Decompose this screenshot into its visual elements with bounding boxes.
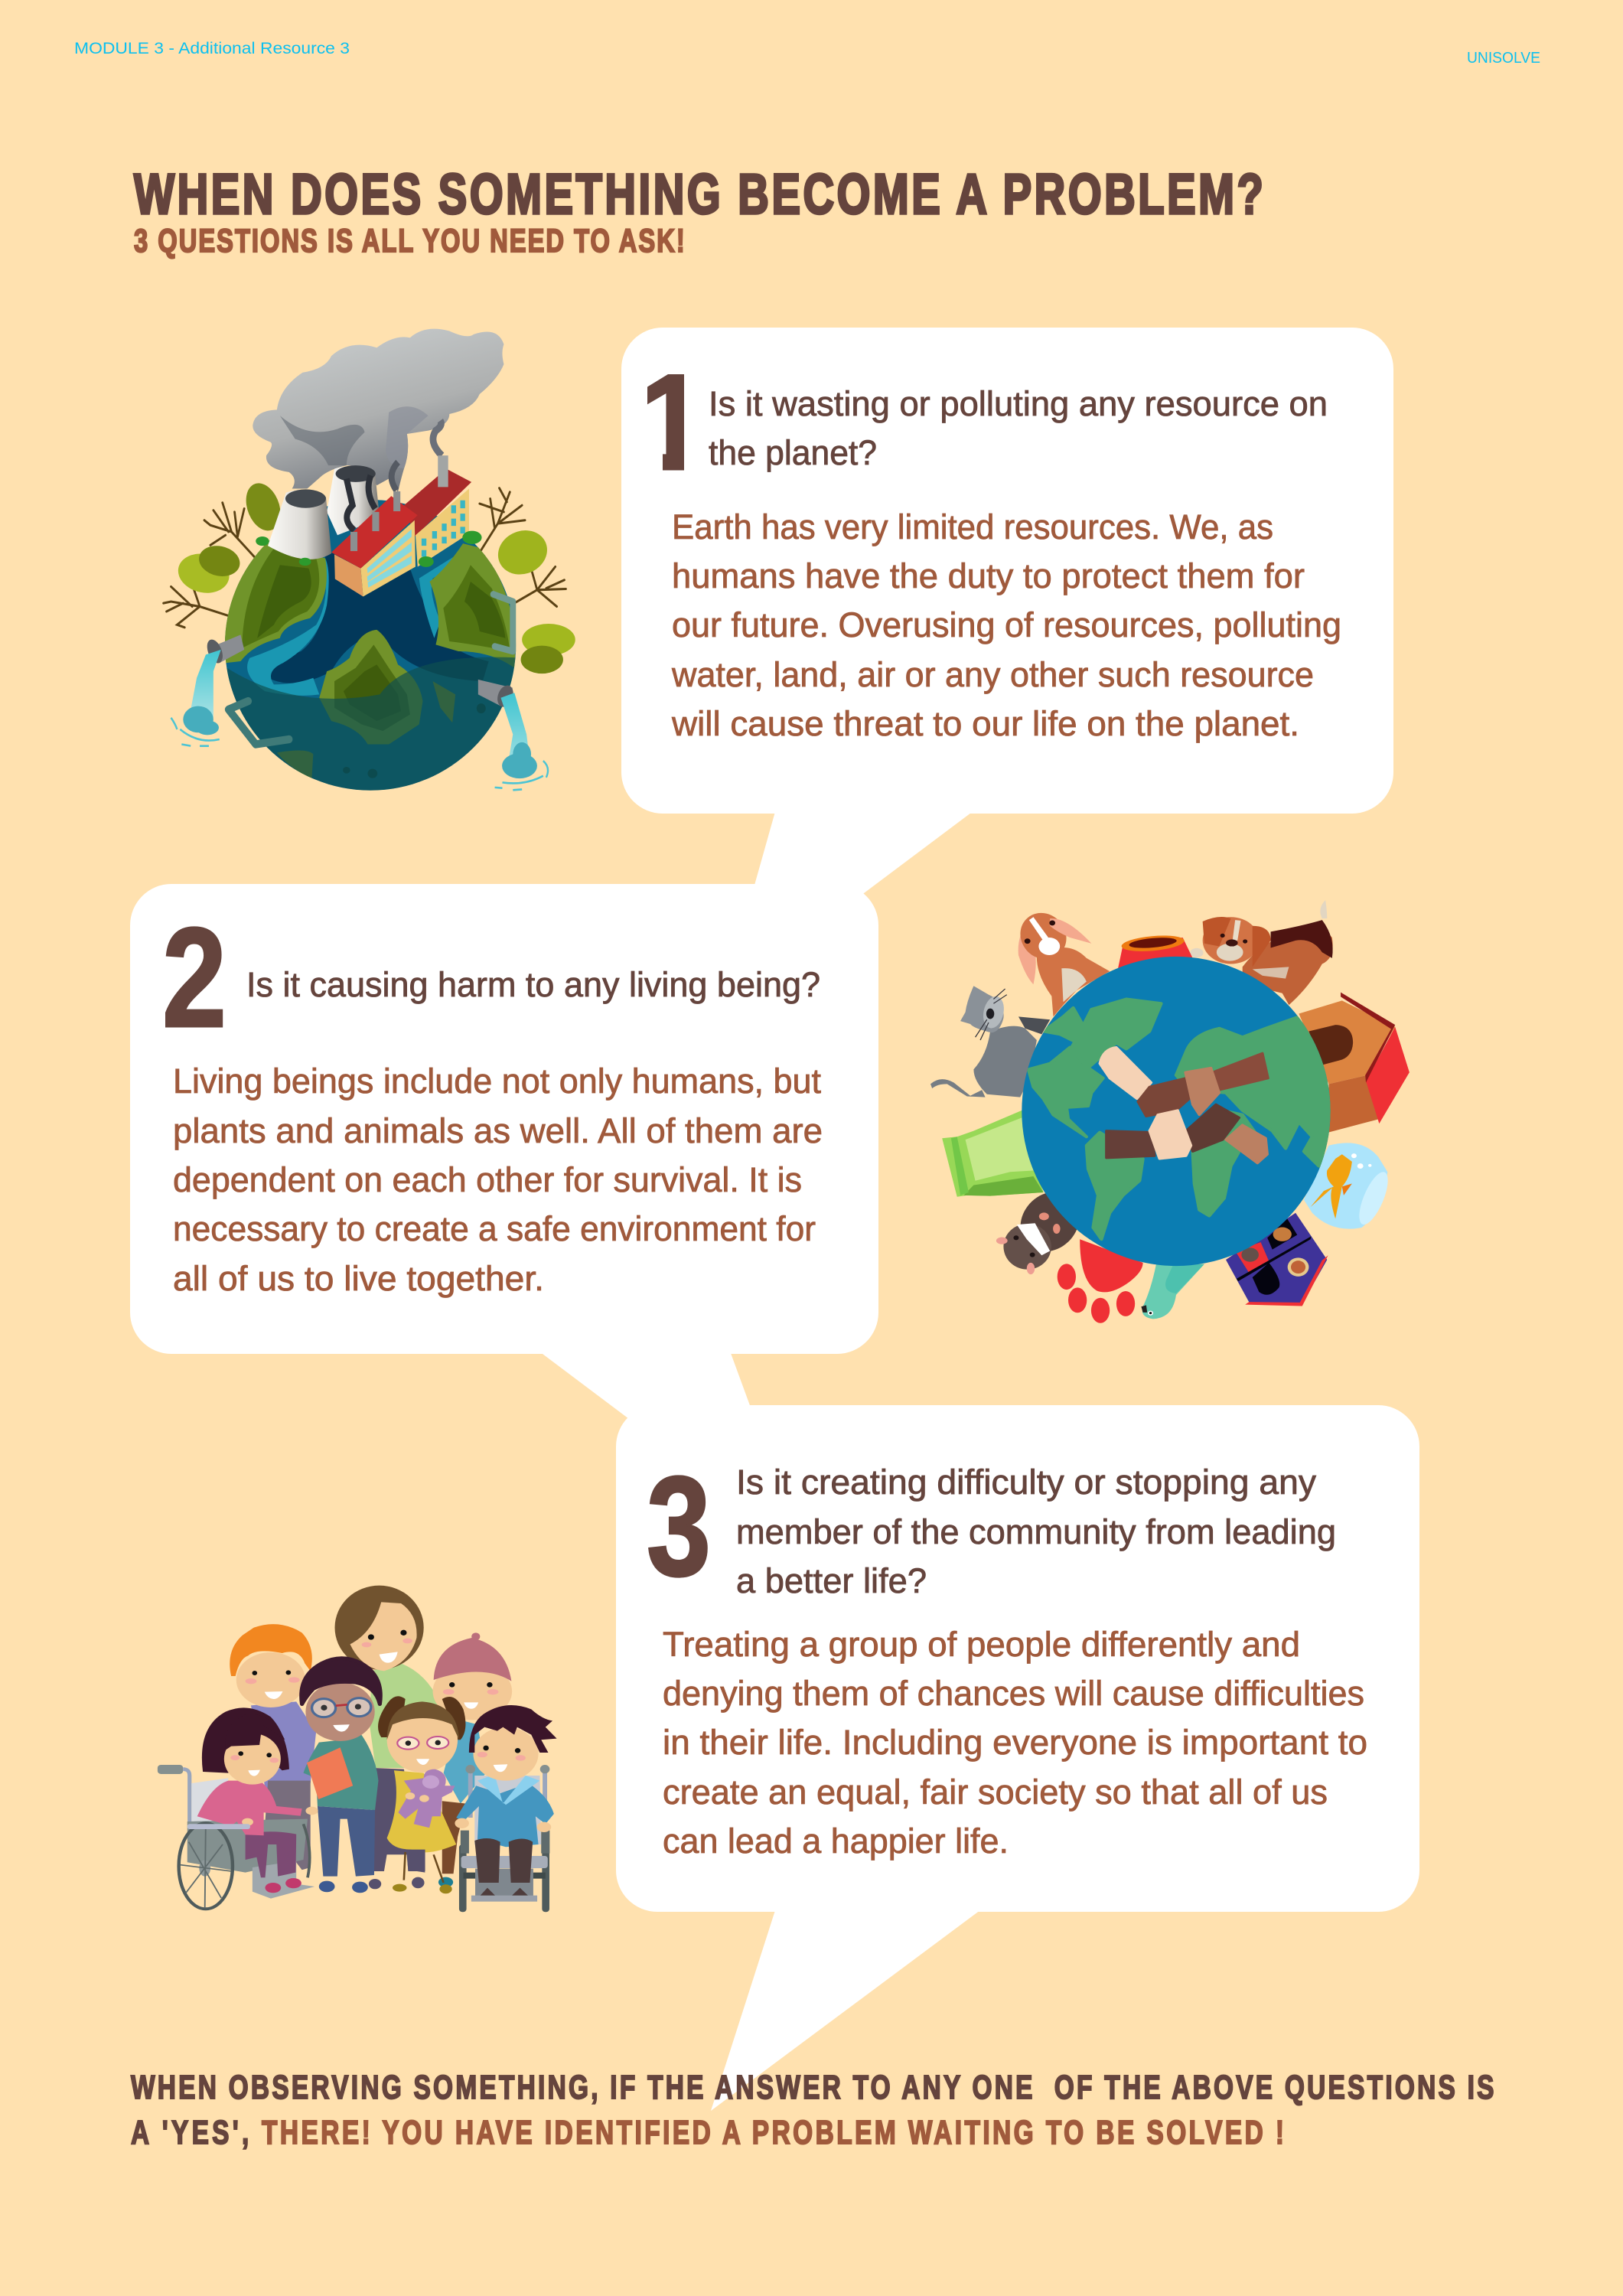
body 1: will cause threat to our life on the planet. (671, 704, 1299, 743)
question 3 (736, 1463, 1336, 1600)
brand label: UNISOLVE (1467, 50, 1540, 67)
bubble 1 (621, 328, 1393, 814)
joined hands (1100, 1048, 1268, 1163)
cat (930, 986, 1050, 1097)
bubble 2 (130, 884, 878, 1354)
boy with glasses and book (301, 1658, 380, 1893)
bubble 3 (616, 1405, 1419, 1912)
globe (1022, 957, 1334, 1266)
body 2: all of us to live together. (173, 1259, 544, 1298)
hamster (996, 1183, 1090, 1274)
subtitle: 3 QUESTIONS IS ALL YOU NEED TO ASK! (134, 223, 685, 259)
rabbit (1014, 908, 1110, 1016)
body 2 (173, 1062, 823, 1298)
body 1: Earth has very limited resources. We, as (672, 507, 1273, 546)
pipes (204, 594, 517, 744)
factory (256, 455, 482, 596)
question 3: a better life? (736, 1561, 927, 1600)
fishbowl (1304, 1143, 1393, 1229)
doghouse (1299, 993, 1410, 1133)
body 3: can lead a happier life. (663, 1821, 1009, 1861)
globe (220, 500, 522, 804)
dog (1190, 900, 1333, 1005)
number 1: 1 (634, 346, 714, 498)
body 1 (671, 507, 1341, 743)
question 3: Is it creating difficulty or stopping any (736, 1463, 1317, 1502)
question 1 (709, 384, 1328, 472)
woman (335, 1586, 439, 1889)
footer conclusion: WHEN OBSERVING SOMETHING, IF THE ANSWER TO ANY ONE OF THE ABOVE QUESTIONS IS (131, 2069, 1494, 2106)
speech tail 3 (711, 1906, 986, 2111)
body 1: water, land, air or any other such resource (671, 655, 1314, 694)
body 3: create an equal, fair society so that all of us (663, 1773, 1328, 1812)
body 1: our future. Overusing of resources, polluting (672, 605, 1341, 644)
module label: MODULE 3 - Additional Resource 3 (74, 40, 350, 57)
panel: question 1 (621, 328, 1393, 895)
smoke (253, 329, 504, 492)
boy with orange hair (230, 1624, 316, 1870)
food bowl (1118, 933, 1193, 968)
number 2: 2 (162, 899, 227, 1057)
body 3: Treating a group of people differently and (663, 1625, 1300, 1664)
polluted water (171, 650, 548, 790)
illustration: polluted earth (164, 329, 575, 804)
panel: question 2 (130, 884, 878, 1424)
footer conclusion: A 'YES', (131, 2115, 249, 2151)
birdhouse (1226, 1213, 1328, 1306)
cooling towers (268, 465, 380, 559)
body 3 (663, 1625, 1367, 1861)
girl with teddy bear (378, 1696, 465, 1893)
footer conclusion (131, 2069, 1494, 2151)
illustration: pets around the globe (930, 900, 1410, 1323)
panel: question 3 (616, 1405, 1419, 2111)
title: WHEN DOES SOMETHING BECOME A PROBLEM? (134, 163, 1263, 226)
paw (1058, 1239, 1143, 1323)
body 3: in their life. Including everyone is important to (663, 1723, 1367, 1762)
boy in wheelchair (455, 1705, 557, 1912)
question 1: Is it wasting or polluting any resource on (709, 384, 1328, 423)
body 2: Living beings include not only humans, but (173, 1062, 821, 1101)
body 1: humans have the duty to protect them for (672, 556, 1305, 595)
pet food bag (942, 1110, 1043, 1197)
footer conclusion: THERE! YOU HAVE IDENTIFIED A PROBLEM WAITING TO BE SOLVED ! (262, 2115, 1284, 2151)
question 1: the planet? (709, 433, 877, 472)
body 2: dependent on each other for survival. It is (173, 1160, 802, 1199)
parrot (1141, 1264, 1204, 1319)
body 2: necessary to create a safe environment for (173, 1209, 816, 1248)
illustration: group of children (158, 1586, 557, 1912)
number 3: 3 (647, 1448, 711, 1606)
question 3: member of the community from leading (736, 1512, 1336, 1551)
trees (164, 477, 575, 673)
speech tail 1 (754, 804, 983, 895)
question 2: Is it causing harm to any living being? (246, 965, 820, 1004)
girl in wheelchair (158, 1707, 318, 1909)
speech tail 2 (533, 1347, 754, 1424)
body 3: denying them of chances will cause difficulties (663, 1674, 1364, 1713)
body 2: plants and animals as well. All of them are (173, 1111, 823, 1150)
child with pink hat (433, 1632, 512, 1887)
